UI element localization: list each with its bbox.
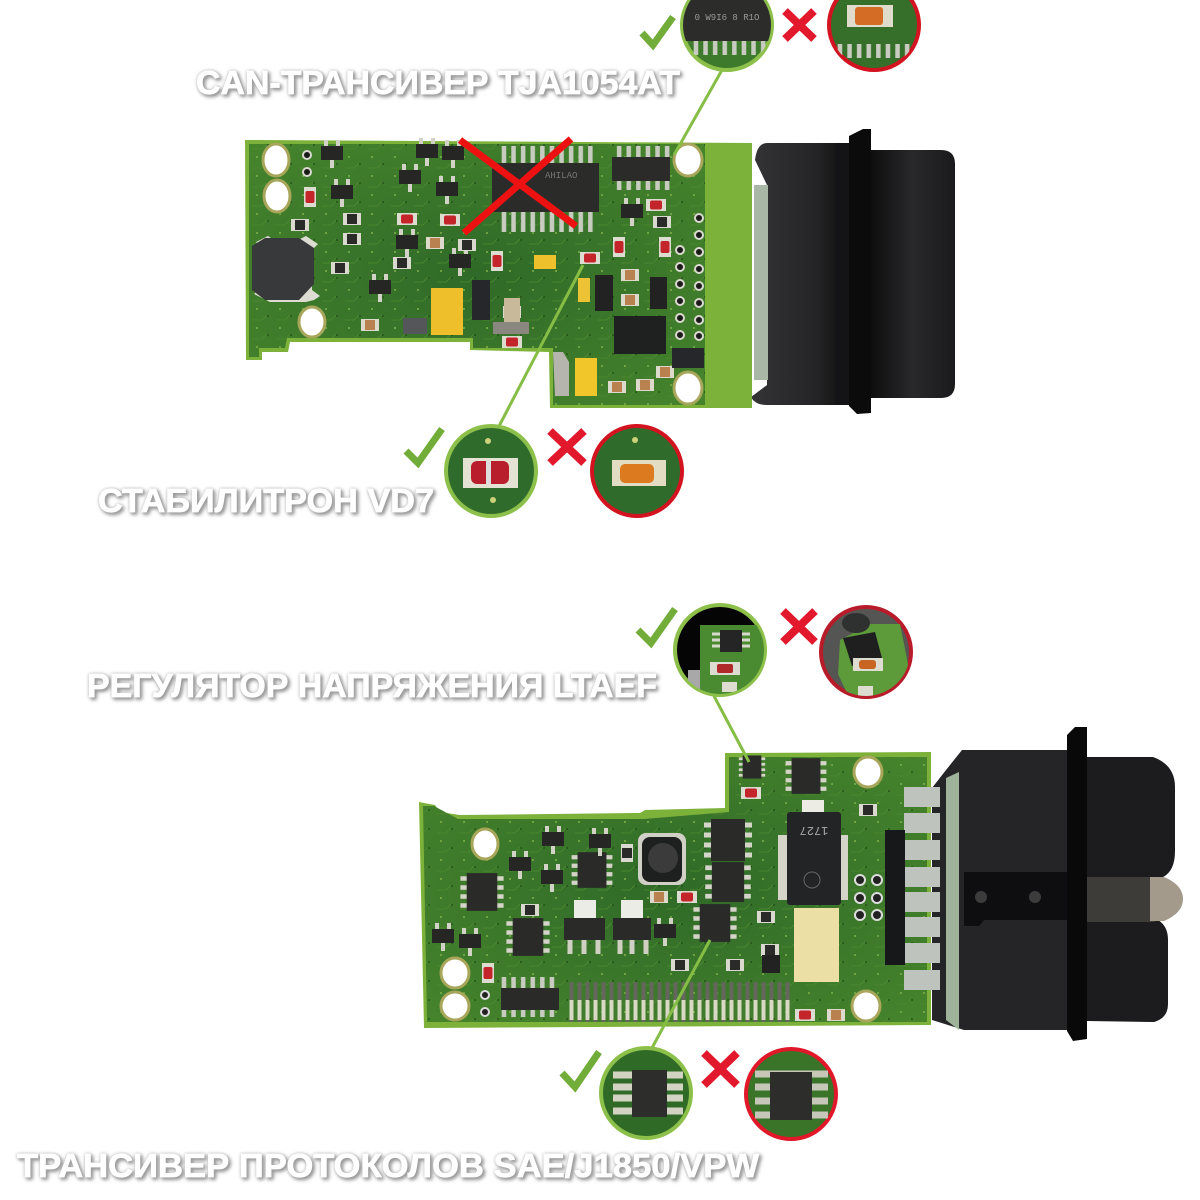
second chip [612,146,670,190]
wrong part: zener diode [592,426,682,516]
check mark [638,609,675,643]
check mark [642,17,673,45]
pin row [569,982,790,1022]
correct part: CAN transceiver [682,0,773,70]
bottom connector [932,727,1183,1041]
wrong part: SAE transceiver [746,1049,836,1139]
inductor [638,833,686,885]
wrong part: voltage regulator [821,607,912,710]
correct part: zener diode [446,426,536,516]
correct part: voltage regulator [675,605,766,700]
main chip [492,146,599,232]
header holes [303,151,703,340]
cross mark [550,431,584,463]
label: voltage regulator: РЕГУЛЯТОР НАПРЯЖЕНИЯ LTAEF [87,667,657,704]
correct part: CAN transceiver: 0 W9I6 8 R1O [695,13,759,23]
cross mark [783,611,815,642]
correct part: SAE transceiver [601,1048,691,1138]
leader line: voltage regulator [714,696,749,762]
surface components [291,138,704,396]
leader line: zener diode [497,265,583,430]
relay [794,908,839,982]
leader line: SAE transceiver [652,940,710,1048]
wrong part: CAN transceiver substitute [829,0,919,70]
black pin header [885,830,905,965]
label: CAN transceiver: CAN-ТРАНСИВЕР TJA1054AT [196,64,680,101]
bottom PCB [419,752,940,1028]
large regulator chip [778,800,848,905]
mounting holes [441,757,882,1021]
top device: circuit board with OBD connector [245,129,955,414]
cross mark [704,1053,737,1085]
mounting holes [263,144,702,404]
main chip: AHILAO [545,171,577,181]
label: zener diode: СТАБИЛИТРОН VD7 [98,482,434,519]
connector pins [904,787,940,990]
large regulator chip: 1727 [800,823,828,837]
red cross over main chip [460,139,576,233]
top PCB [245,138,752,408]
leader line: transceiver [674,70,722,155]
top connector [751,129,955,414]
bottom device: circuit board with OBD connector [419,727,1183,1041]
via holes [481,875,882,1016]
check mark [406,429,442,463]
cross mark [785,11,814,39]
chips and passives [432,755,877,1021]
check mark [562,1052,599,1087]
label: SAE transceiver: ТРАНСИВЕР ПРОТОКОЛОВ SAE/J1850/VPW [17,1147,760,1184]
buzzer [252,236,320,302]
